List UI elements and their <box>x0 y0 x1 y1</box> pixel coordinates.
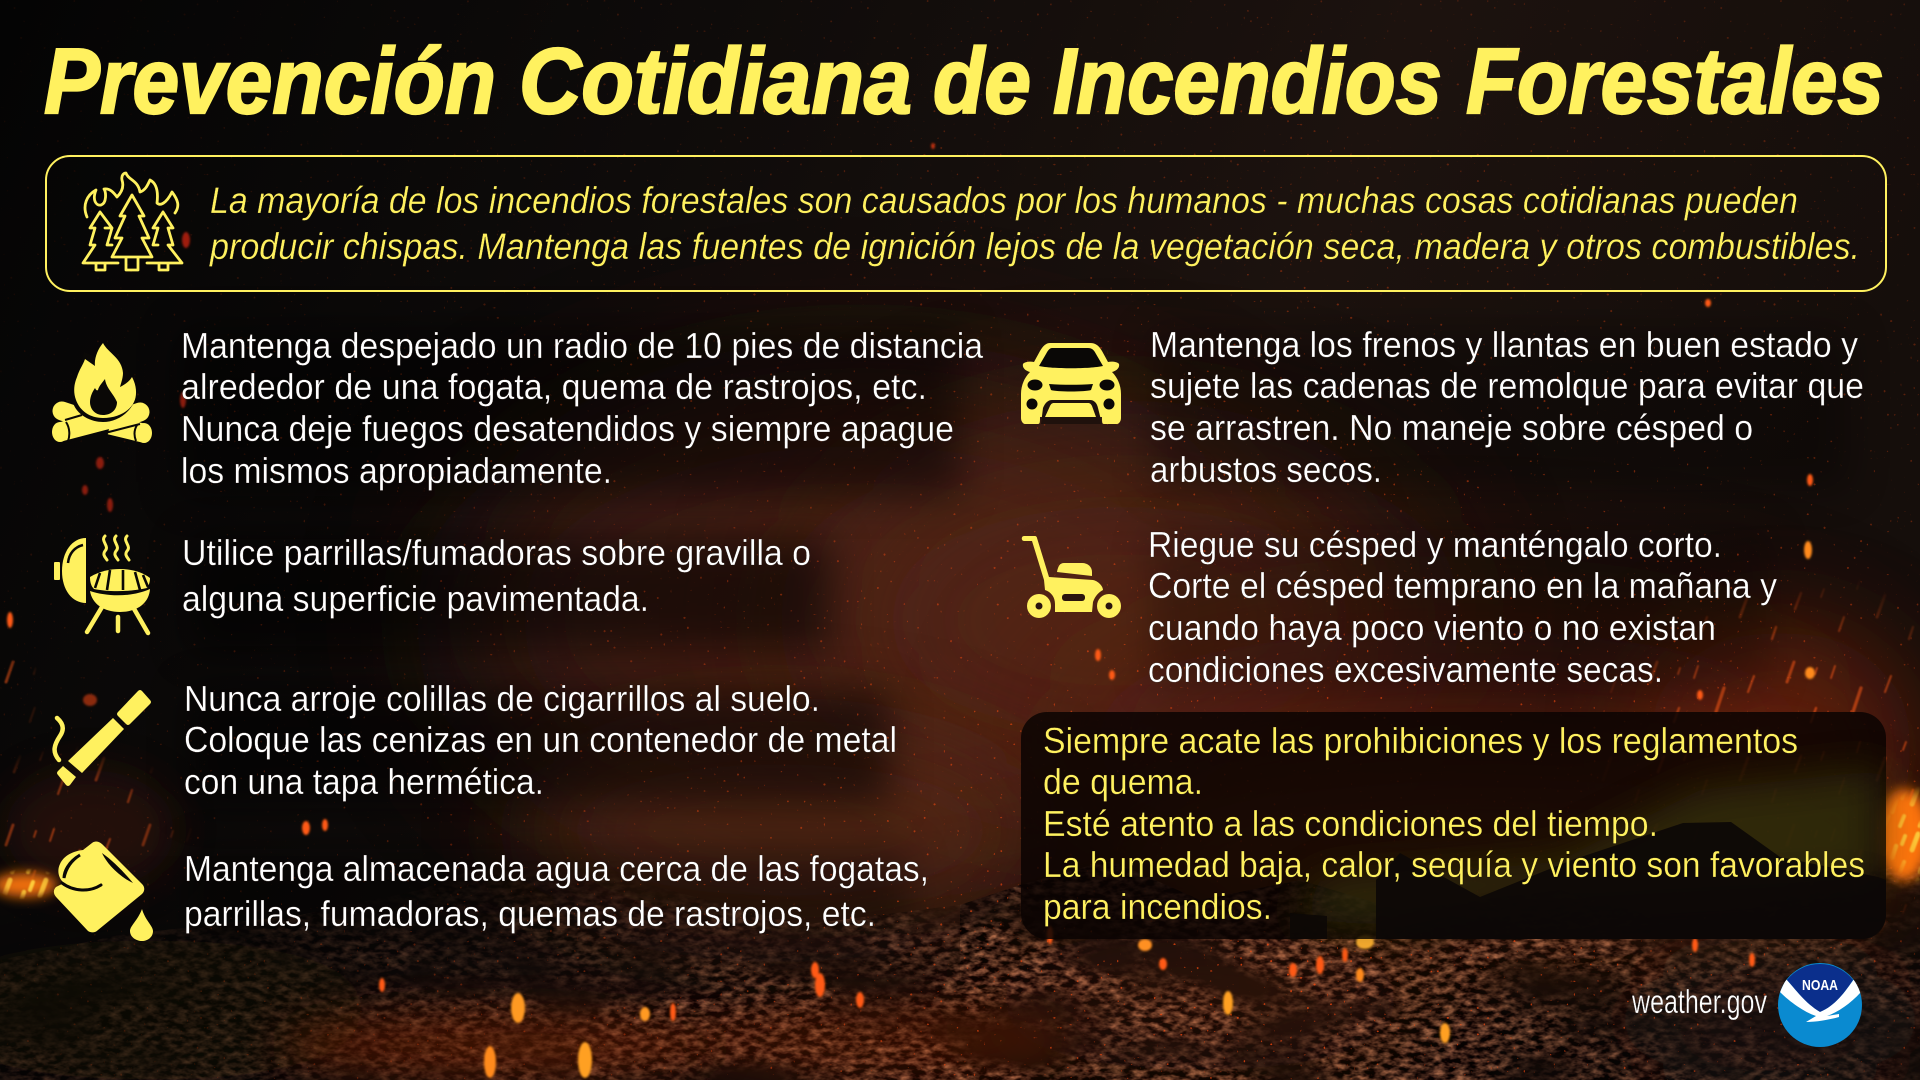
icon: cigarette <box>55 690 151 786</box>
text: Coloque las cenizas en un contenedor de metal <box>184 719 897 760</box>
icon: car <box>1021 343 1121 424</box>
text: parrillas, fumadoras, quemas de rastrojos, etc. <box>184 893 876 934</box>
text: alguna superficie pavimentada. <box>182 578 649 619</box>
text: Nunca deje fuegos desatendidos y siempre apague <box>181 408 954 449</box>
icon: NOAA logo: NOAA <box>1802 977 1838 994</box>
text: se arrastren. No maneje sobre césped o <box>1150 407 1753 448</box>
text: Nunca arroje colillas de cigarrillos al suelo. <box>184 678 820 719</box>
title: Forestales <box>1466 29 1884 133</box>
text <box>1150 324 1864 490</box>
edge flames <box>1878 789 1920 881</box>
olive glow seen through the panel <box>1297 770 1880 925</box>
title: Prevención <box>44 29 496 133</box>
item: lawn mower <box>1022 524 1777 690</box>
text <box>182 532 811 619</box>
intro text <box>209 180 1860 267</box>
text <box>181 325 984 491</box>
icon: lawn mower <box>1022 536 1121 618</box>
text <box>1148 524 1777 690</box>
callout text: Esté atento a las condiciones del tiempo. <box>1043 803 1658 844</box>
text <box>184 848 929 934</box>
panel: burn regulations callout <box>1021 712 1886 939</box>
text: Utilice parrillas/fumadoras sobre gravilla o <box>182 532 811 573</box>
title: Cotidiana <box>519 29 912 133</box>
text: sujete las cadenas de remolque para evitar que <box>1150 365 1864 406</box>
footer: weather.gov: weather.gov <box>1631 983 1767 1020</box>
panel: intro callout <box>46 156 1886 291</box>
item: water bucket <box>54 842 929 941</box>
rocks <box>0 863 1920 1080</box>
text: con una tapa hermética. <box>184 761 544 802</box>
text: arbustos secos. <box>1150 449 1382 490</box>
title: de <box>933 29 1031 133</box>
icon: grill <box>54 536 150 633</box>
item: car <box>1021 324 1864 490</box>
text: Mantenga almacenada agua cerca de las fogatas, <box>184 848 929 889</box>
text: alrededor de una fogata, quema de rastrojos, etc. <box>181 366 927 407</box>
text: Mantenga despejado un radio de 10 pies de distancia <box>181 325 984 366</box>
icon: NOAA logo <box>1778 963 1862 1047</box>
text: Mantenga los frenos y llantas en buen estado y <box>1150 324 1858 365</box>
callout text <box>1043 720 1865 927</box>
text <box>184 678 897 802</box>
item: cigarette <box>55 678 897 802</box>
callout text: de quema. <box>1043 761 1203 802</box>
item: campfire <box>52 325 984 491</box>
intro text: La mayoría de los incendios forestales son causados por los humanos - muchas cosas cotidianas pueden <box>210 180 1798 221</box>
dark shadows behind the text columns <box>190 540 830 650</box>
text: Riegue su césped y manténgalo corto. <box>1148 524 1722 565</box>
text: cuando haya poco viento o no existan <box>1148 607 1716 648</box>
callout text: La humedad baja, calor, sequía y viento son favorables <box>1043 844 1865 885</box>
callout text: para incendios. <box>1043 886 1272 927</box>
text: Corte el césped temprano en la mañana y <box>1148 565 1777 606</box>
item: grill <box>54 532 811 633</box>
text: los mismos apropiadamente. <box>181 450 612 491</box>
title <box>44 29 1884 133</box>
icon: campfire <box>52 343 152 443</box>
icon: bucket <box>54 842 153 941</box>
icon: burning trees <box>83 173 182 270</box>
callout text: Siempre acate las prohibiciones y los reglamentos <box>1043 720 1798 761</box>
text: condiciones excesivamente secas. <box>1148 649 1663 690</box>
title: Incendios <box>1053 29 1442 133</box>
